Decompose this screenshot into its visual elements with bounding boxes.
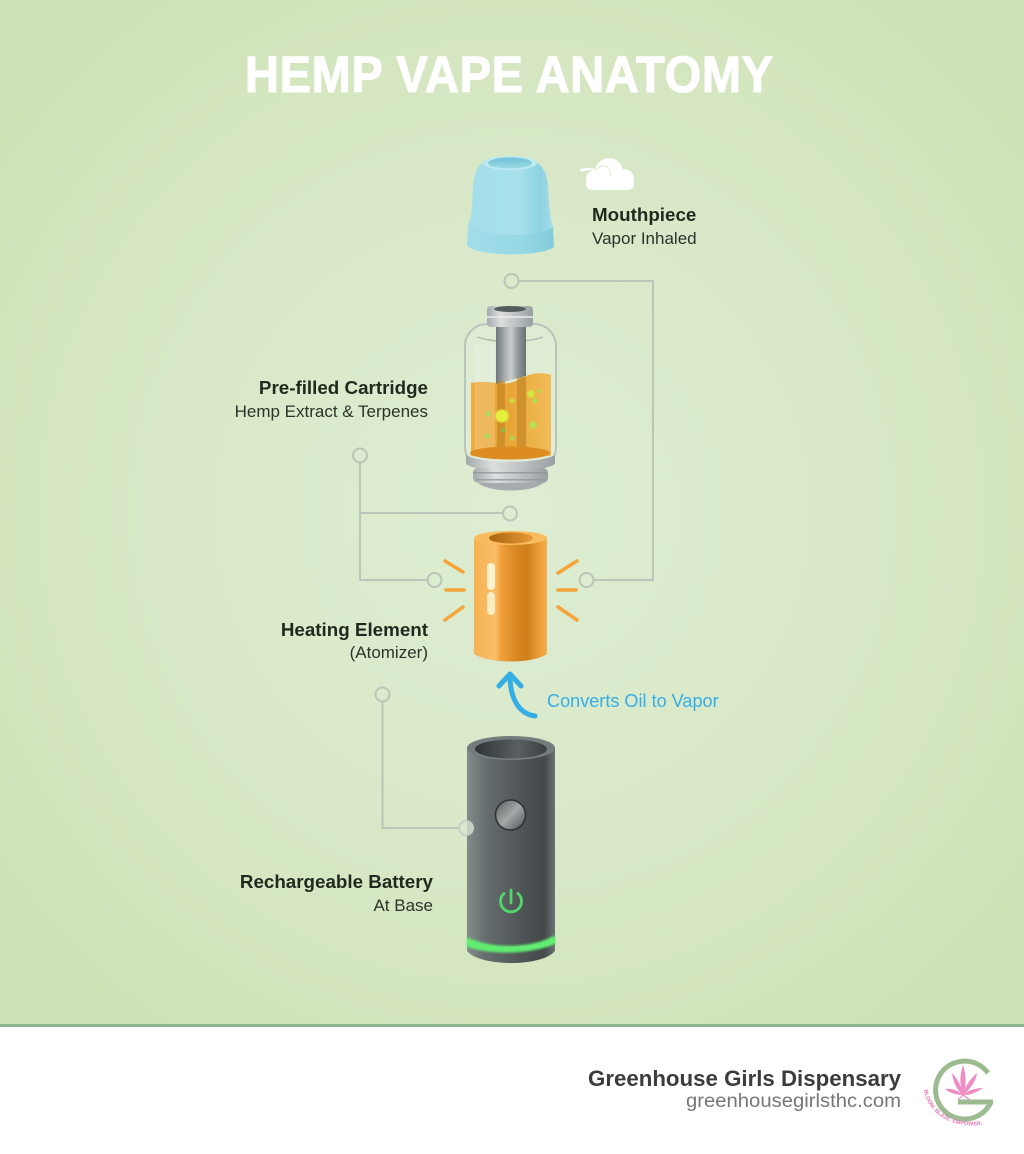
power button <box>496 800 526 830</box>
icon: pre-filled cartridge <box>465 306 556 490</box>
label: mouthpiece: Vapor Inhaled <box>592 229 697 248</box>
icon: heating element <box>474 531 547 662</box>
arrow: converts oil to vapor <box>499 674 535 716</box>
label: rechargeable battery <box>240 871 434 915</box>
label: heating element: (Atomizer) <box>350 643 428 662</box>
footer <box>0 1024 1024 1154</box>
power symbol <box>501 890 522 912</box>
green light band <box>467 935 555 953</box>
title: HEMP VAPE ANATOMY <box>245 47 773 103</box>
logo: BLOOM. BLAZE. EMPOWER. <box>924 1090 982 1126</box>
glass body <box>465 324 556 469</box>
neck <box>487 306 533 327</box>
connector: battery <box>376 688 473 835</box>
icon: cloud <box>579 158 634 190</box>
footer brand text: Greenhouse Girls Dispensary <box>588 1066 902 1091</box>
label: pre-filled cartridge: Hemp Extract & Terpenes <box>235 402 428 421</box>
oil <box>471 373 551 456</box>
cannabis leaf <box>945 1065 983 1100</box>
icon: rechargeable battery <box>467 736 555 963</box>
tagline <box>924 1090 990 1125</box>
connector: mouthpiece to heating element <box>504 274 653 587</box>
label: heating element: Heating Element <box>281 619 429 640</box>
callout: converts oil to vapor: Converts Oil to Vapor <box>547 691 719 711</box>
icon: mouthpiece <box>467 156 554 254</box>
footer brand text: greenhousegirlsthc.com <box>686 1090 901 1112</box>
connector: cartridge to heating element <box>353 448 517 587</box>
logo <box>924 1058 994 1126</box>
label: mouthpiece <box>592 204 697 248</box>
heat rays <box>445 561 577 620</box>
label: rechargeable battery: Rechargeable Battery <box>240 871 434 892</box>
label: pre-filled cartridge: Pre-filled Cartridge <box>259 377 428 398</box>
metal base <box>466 455 555 472</box>
label: heating element <box>281 619 429 662</box>
label: rechargeable battery: At Base <box>373 896 433 915</box>
label: pre-filled cartridge <box>235 377 428 421</box>
bubbles <box>484 389 541 440</box>
label: mouthpiece: Mouthpiece <box>592 204 696 225</box>
footer brand text <box>588 1066 902 1112</box>
